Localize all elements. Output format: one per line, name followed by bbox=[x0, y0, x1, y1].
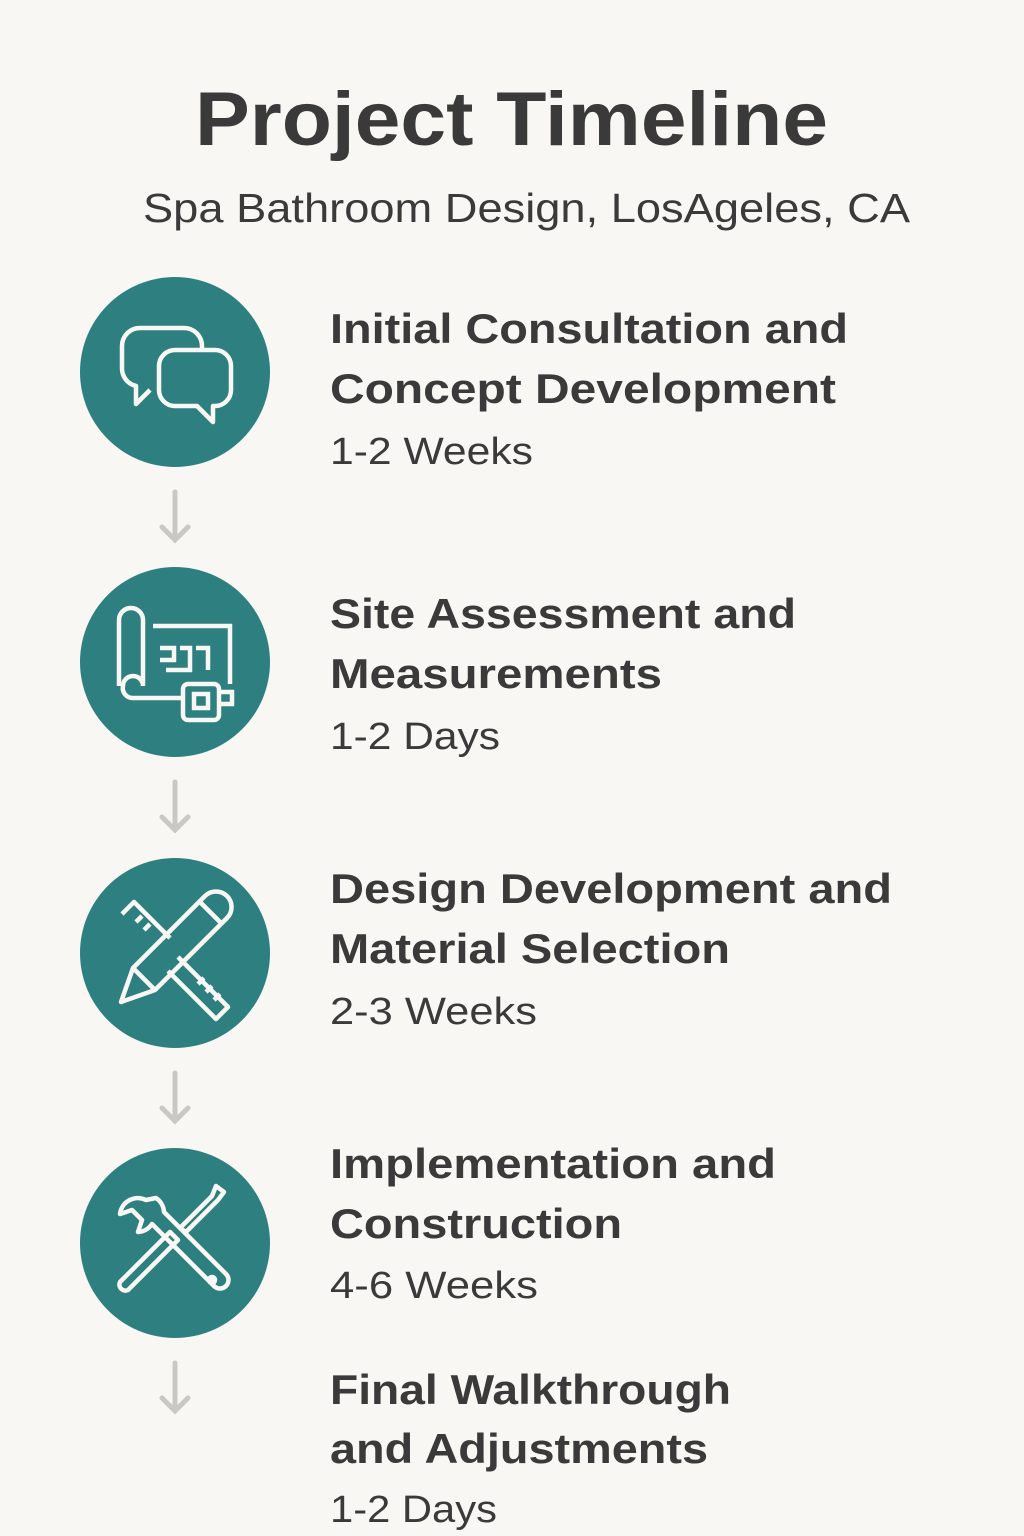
arrow 4 bbox=[162, 1363, 188, 1411]
step 4 text: 4-6 Weeks bbox=[330, 1265, 538, 1307]
step 5 text bbox=[330, 1366, 731, 1531]
step 2 text: Measurements bbox=[330, 650, 662, 697]
step 2 text: Site Assessment and bbox=[330, 590, 796, 637]
step 2 text bbox=[330, 590, 796, 758]
arrow 2 bbox=[162, 782, 188, 830]
step 3 text bbox=[330, 865, 892, 1033]
step 2 text: 1-2 Days bbox=[330, 716, 500, 758]
icon: blueprint bbox=[80, 567, 270, 757]
step 5 text: 1-2 Days bbox=[330, 1489, 497, 1531]
step 4 text bbox=[330, 1140, 776, 1307]
step 5 text: Final Walkthrough bbox=[330, 1366, 731, 1413]
step 4 text: Construction bbox=[330, 1200, 622, 1247]
title: Project Timeline bbox=[195, 77, 828, 162]
step 1 text: Initial Consultation and bbox=[330, 305, 848, 352]
icon: chat bubbles bbox=[80, 277, 270, 467]
icon: wrench and screwdriver bbox=[80, 1148, 270, 1338]
step 3 text: Design Development and bbox=[330, 865, 892, 912]
step 5 text: and Adjustments bbox=[330, 1425, 708, 1472]
step 3 text: 2-3 Weeks bbox=[330, 991, 537, 1033]
arrow 1 bbox=[162, 492, 188, 540]
step 4 text: Implementation and bbox=[330, 1140, 776, 1187]
step 1 text: 1-2 Weeks bbox=[330, 431, 533, 473]
step 3 text: Material Selection bbox=[330, 925, 730, 972]
arrow 3 bbox=[162, 1073, 188, 1121]
icon: pencil and ruler bbox=[80, 858, 270, 1048]
step 1 text bbox=[330, 305, 848, 473]
step 1 text: Concept Development bbox=[330, 365, 836, 412]
subtitle: Spa Bathroom Design, LosAgeles, CA bbox=[143, 185, 911, 231]
